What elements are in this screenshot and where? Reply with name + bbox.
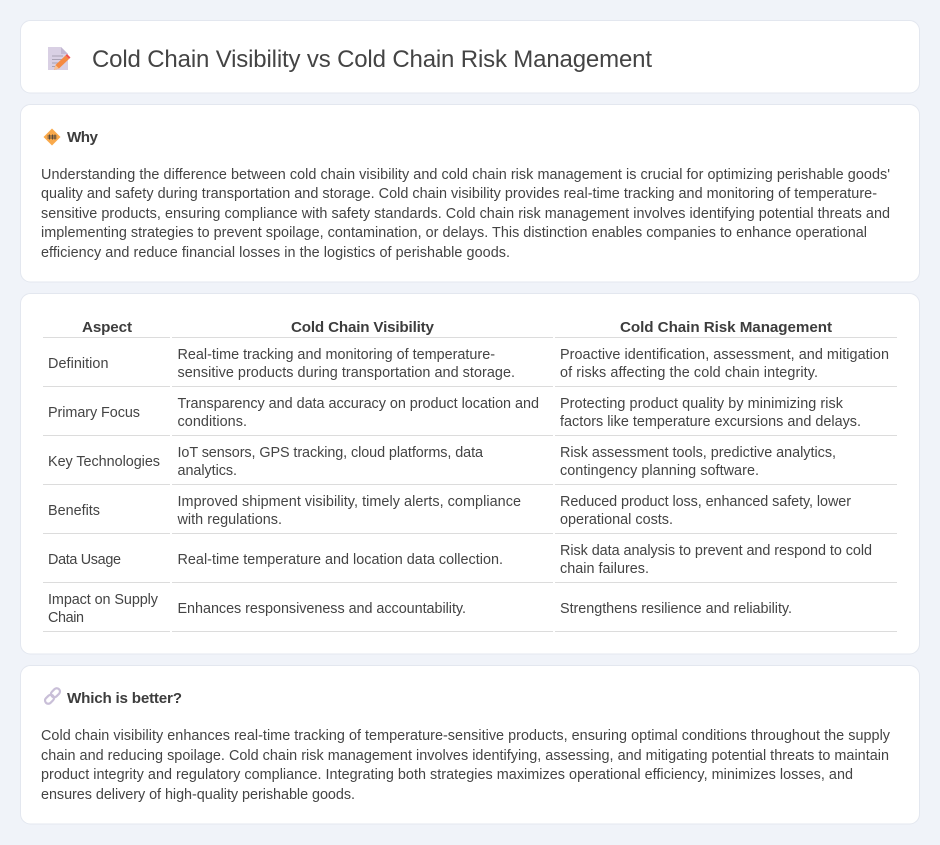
text block: which is better paragraph: ensures delivery of high-quality perishable goods. bbox=[41, 787, 355, 803]
row: data usage bbox=[48, 543, 872, 577]
table header: Cold Chain Risk Management bbox=[620, 319, 832, 336]
row: key technologies: Key Technologies bbox=[48, 454, 160, 470]
icon: warning diamond bbox=[44, 128, 60, 146]
row: definition: Definition bbox=[48, 356, 108, 372]
heading: which is better: Which is better? bbox=[67, 690, 182, 707]
row: key technologies: analytics. bbox=[178, 463, 237, 479]
row: primary focus: Transparency and data accuracy on product location and bbox=[178, 396, 539, 412]
title: Cold Chain Visibility vs Cold Chain Risk Management bbox=[92, 46, 652, 73]
table header: Cold Chain Visibility bbox=[291, 319, 435, 336]
text block: why paragraph: sensitive products, ensuring compliance with safety standards. Cold chain risk management involves identifying potential threats and bbox=[41, 206, 890, 222]
text block: which is better paragraph: product integrity and regulatory compliance. Integrating both strategies maximizes operational efficiency, minimizes losses, and bbox=[41, 767, 853, 783]
row: primary focus: conditions. bbox=[178, 414, 247, 430]
row: data usage: Risk data analysis to prevent and respond to cold bbox=[560, 543, 872, 559]
icon: memo with pencil bbox=[48, 47, 70, 70]
row: definition: Proactive identification, assessment, and mitigation bbox=[560, 347, 889, 363]
row: definition: sensitive products during transportation and storage. bbox=[178, 365, 515, 381]
row: benefits bbox=[48, 494, 851, 528]
row: definition: of risks affecting the cold chain integrity. bbox=[560, 365, 818, 381]
text block: why paragraph bbox=[41, 167, 890, 261]
row: primary focus bbox=[48, 396, 861, 430]
row: benefits: Benefits bbox=[48, 503, 100, 519]
row: benefits: Reduced product loss, enhanced safety, lower bbox=[560, 494, 851, 510]
row: primary focus: Protecting product quality by minimizing risk bbox=[560, 396, 844, 412]
row: data usage: Real-time temperature and location data collection. bbox=[178, 552, 503, 568]
row: impact on supply chain: Chain bbox=[48, 610, 84, 626]
row: key technologies bbox=[48, 445, 836, 479]
table header: Aspect bbox=[82, 319, 132, 336]
row: impact on supply chain: Enhances responsiveness and accountability. bbox=[178, 601, 466, 617]
panel: which is better bbox=[20, 666, 920, 824]
row: primary focus: Primary Focus bbox=[48, 405, 140, 421]
panel: title header bbox=[20, 20, 920, 93]
row: key technologies: contingency planning software. bbox=[560, 463, 759, 479]
row: impact on supply chain: Strengthens resilience and reliability. bbox=[560, 601, 792, 617]
row: impact on supply chain: Impact on Supply bbox=[48, 592, 159, 608]
text block: which is better paragraph bbox=[41, 728, 891, 803]
icon: link bbox=[44, 687, 61, 705]
text block: why paragraph: implementing strategies to prevent spoilage, contamination, or delays. This distinction enables companies to enhance operational bbox=[41, 225, 867, 241]
row: benefits: Improved shipment visibility, timely alerts, compliance bbox=[178, 494, 521, 510]
panel: why bbox=[20, 104, 920, 282]
row: benefits: operational costs. bbox=[560, 512, 673, 528]
row: impact on supply chain bbox=[48, 592, 792, 626]
row: definition: Real-time tracking and monitoring of temperature- bbox=[178, 347, 495, 363]
row: key technologies: Risk assessment tools, predictive analytics, bbox=[560, 445, 836, 461]
row: benefits: with regulations. bbox=[176, 512, 282, 528]
row: data usage: Data Usage bbox=[48, 552, 121, 568]
text block: which is better paragraph: Cold chain visibility enhances real-time tracking of temperature-sensitive products, ensuring optimal conditions throughout the supply bbox=[41, 728, 891, 744]
row: primary focus: factors like temperature excursions and delays. bbox=[560, 414, 861, 430]
text block: why paragraph: Understanding the difference between cold chain visibility and cold chain risk management is crucial for optimizing perishable goods' bbox=[41, 167, 890, 183]
text block: why paragraph: quality and safety during transportation and storage. Cold chain visibility provides real-time tracking and monitoring of temperature- bbox=[41, 186, 877, 202]
row: data usage: chain failures. bbox=[560, 561, 649, 577]
heading: why: Why bbox=[67, 129, 99, 146]
text block: which is better paragraph: chain and reducing spoilage. Cold chain risk management involves identifying, assessing, and mitigating potential threats to maintain bbox=[41, 748, 889, 764]
row: key technologies: IoT sensors, GPS tracking, cloud platforms, data bbox=[178, 445, 483, 461]
text block: why paragraph: efficiency and reduce financial losses in the logistics of perishable goods. bbox=[41, 245, 510, 261]
table header bbox=[82, 319, 832, 336]
panel: comparison table bbox=[20, 294, 920, 654]
row: definition bbox=[48, 347, 889, 381]
